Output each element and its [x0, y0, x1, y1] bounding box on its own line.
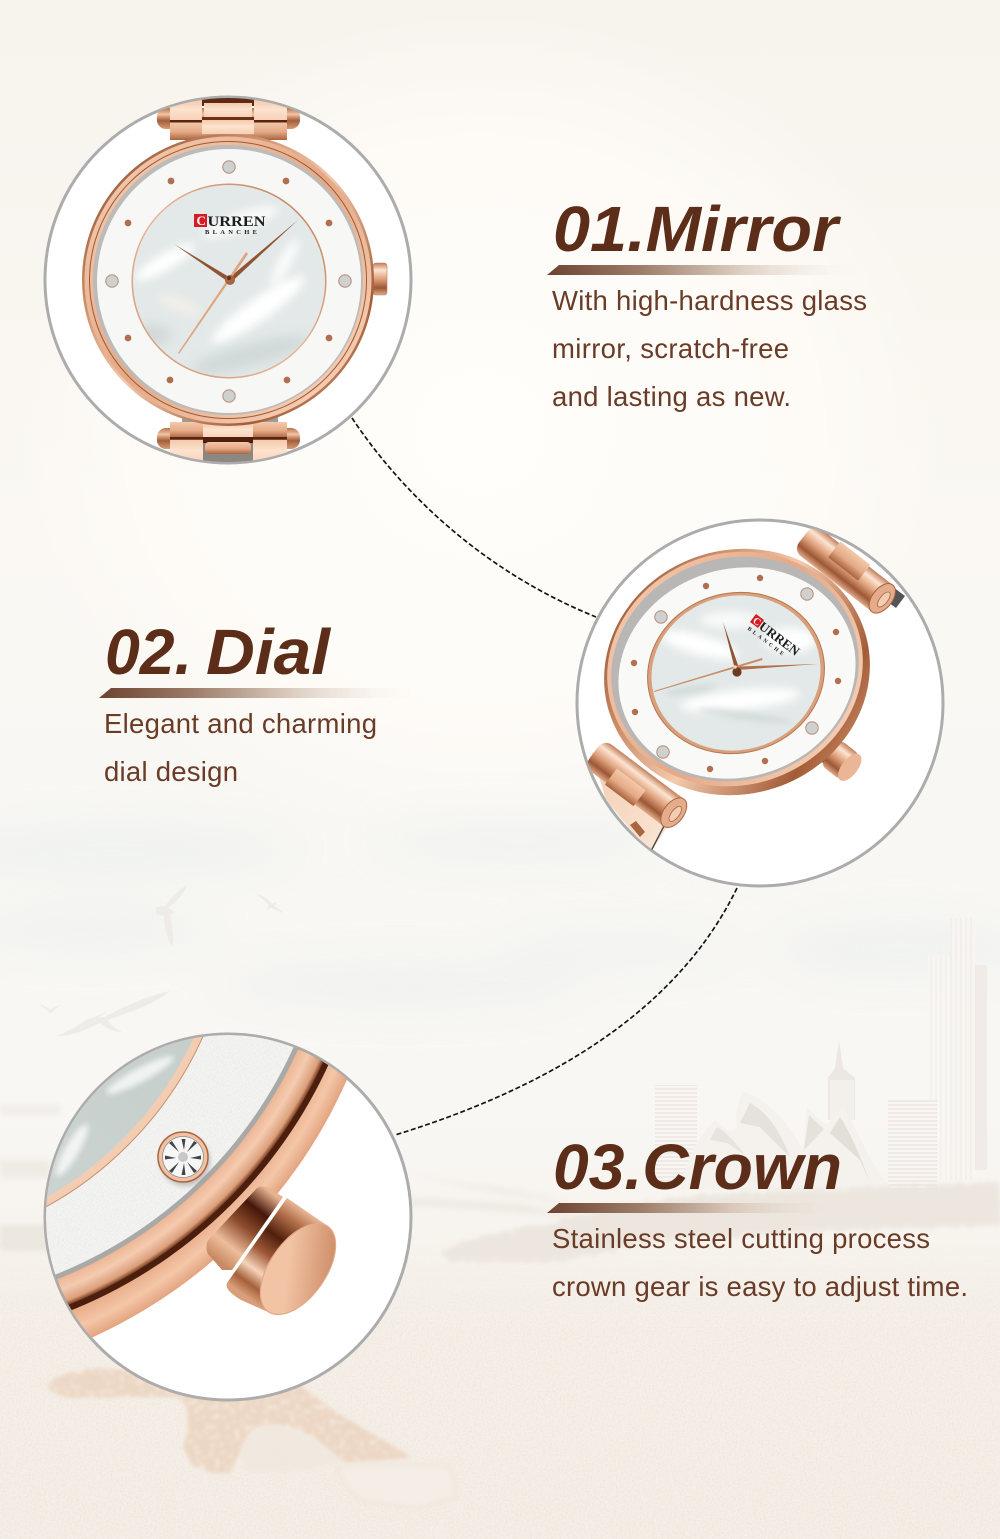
mother of pearl centre: [647, 592, 825, 754]
watch bracelet top and bottom: [157, 96, 300, 465]
dial indices: crystals and studs: [631, 575, 841, 772]
brand logo: [744, 612, 803, 664]
crown stem and cap: [206, 1186, 336, 1316]
crown: [813, 734, 866, 785]
text: mirror description: mirror, scratch-free: [552, 333, 789, 364]
heading: 02. Dial: 02.: [105, 616, 192, 688]
skyline: [655, 918, 987, 1190]
brand logo: URREN: [756, 618, 803, 659]
brand logo: URREN: [208, 214, 266, 230]
crystal close-up: [158, 1132, 210, 1186]
watch hands: [654, 622, 818, 692]
dial indices: crystals and studs: [106, 161, 351, 402]
heading: 03.Crown: 03.Crown: [553, 1131, 842, 1203]
birds: [38, 885, 284, 1036]
brand logo: [194, 213, 266, 236]
opera house shells: [680, 1092, 894, 1190]
brand logo: C: [750, 615, 763, 629]
mother of pearl centre: [128, 184, 326, 381]
watch case and dial: [572, 515, 902, 829]
circle: close-up of crown: [44, 1032, 552, 1402]
text: dial description: dial design: [104, 756, 238, 787]
dashed connector: dial to crown: [395, 888, 737, 1135]
starfish: [48, 1368, 457, 1508]
watch hands: [174, 220, 298, 354]
text: dial description: [104, 708, 377, 787]
brand logo: BLANCHE: [746, 626, 785, 657]
heading: 02. Dial: [99, 616, 410, 698]
text: crown description: crown gear is easy to adjust time.: [552, 1271, 968, 1302]
circle: angled view of watch: [572, 515, 943, 886]
brand logo: C: [196, 213, 206, 228]
tree covered headland: [440, 1182, 1000, 1262]
text: crown description: Stainless steel cutting process: [552, 1223, 930, 1254]
text: mirror description: and lasting as new.: [552, 381, 791, 412]
text: dial description: Elegant and charming: [104, 708, 377, 739]
text: mirror description: [552, 285, 867, 412]
watch case and dial: [82, 134, 374, 426]
brand logo: BLANCHE: [205, 229, 257, 236]
circle: front view of watch: [45, 96, 411, 465]
heading: 01.Mirror: 01.Mirror: [553, 193, 841, 265]
heading: 02. Dial: Dial: [206, 616, 331, 688]
bracelet links: [582, 522, 905, 853]
enlarged case, dial and pearl: [46, 1035, 347, 1338]
dashed connector: mirror to dial: [352, 418, 596, 617]
shoreline and land bands: [0, 1105, 600, 1251]
text: mirror description: With high-hardness glass: [552, 285, 867, 316]
crown: [373, 263, 387, 295]
clouds: [0, 822, 1000, 1007]
text: crown description: [552, 1223, 968, 1302]
